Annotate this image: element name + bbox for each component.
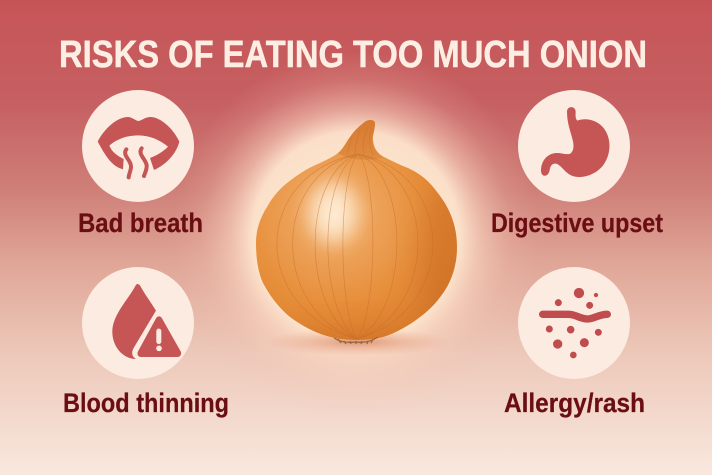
onion bulb [256,120,457,340]
icon: blood drop with warning [112,284,181,359]
onion illustration [256,120,457,354]
onion shadow [263,328,453,356]
label: Allergy/rash [504,388,645,418]
icon: lips with odor [98,117,179,177]
onion skin lines [277,127,433,339]
label: Blood thinning [63,388,229,418]
label: Digestive upset [491,208,663,238]
onion roots [334,337,378,344]
label: Bad breath [78,208,203,238]
icon: stomach [541,107,609,177]
icon circle [82,90,194,202]
panel: bad breath [78,90,203,238]
onion shading and highlight [298,120,457,340]
panel: digestive upset [491,90,663,238]
onion glow [171,50,541,420]
panel: allergy/rash [504,267,645,418]
icon circle [518,267,630,379]
icon circle [518,90,630,202]
panel: blood thinning [63,267,229,418]
icon: skin rash [543,288,607,358]
icon circle [82,267,194,379]
